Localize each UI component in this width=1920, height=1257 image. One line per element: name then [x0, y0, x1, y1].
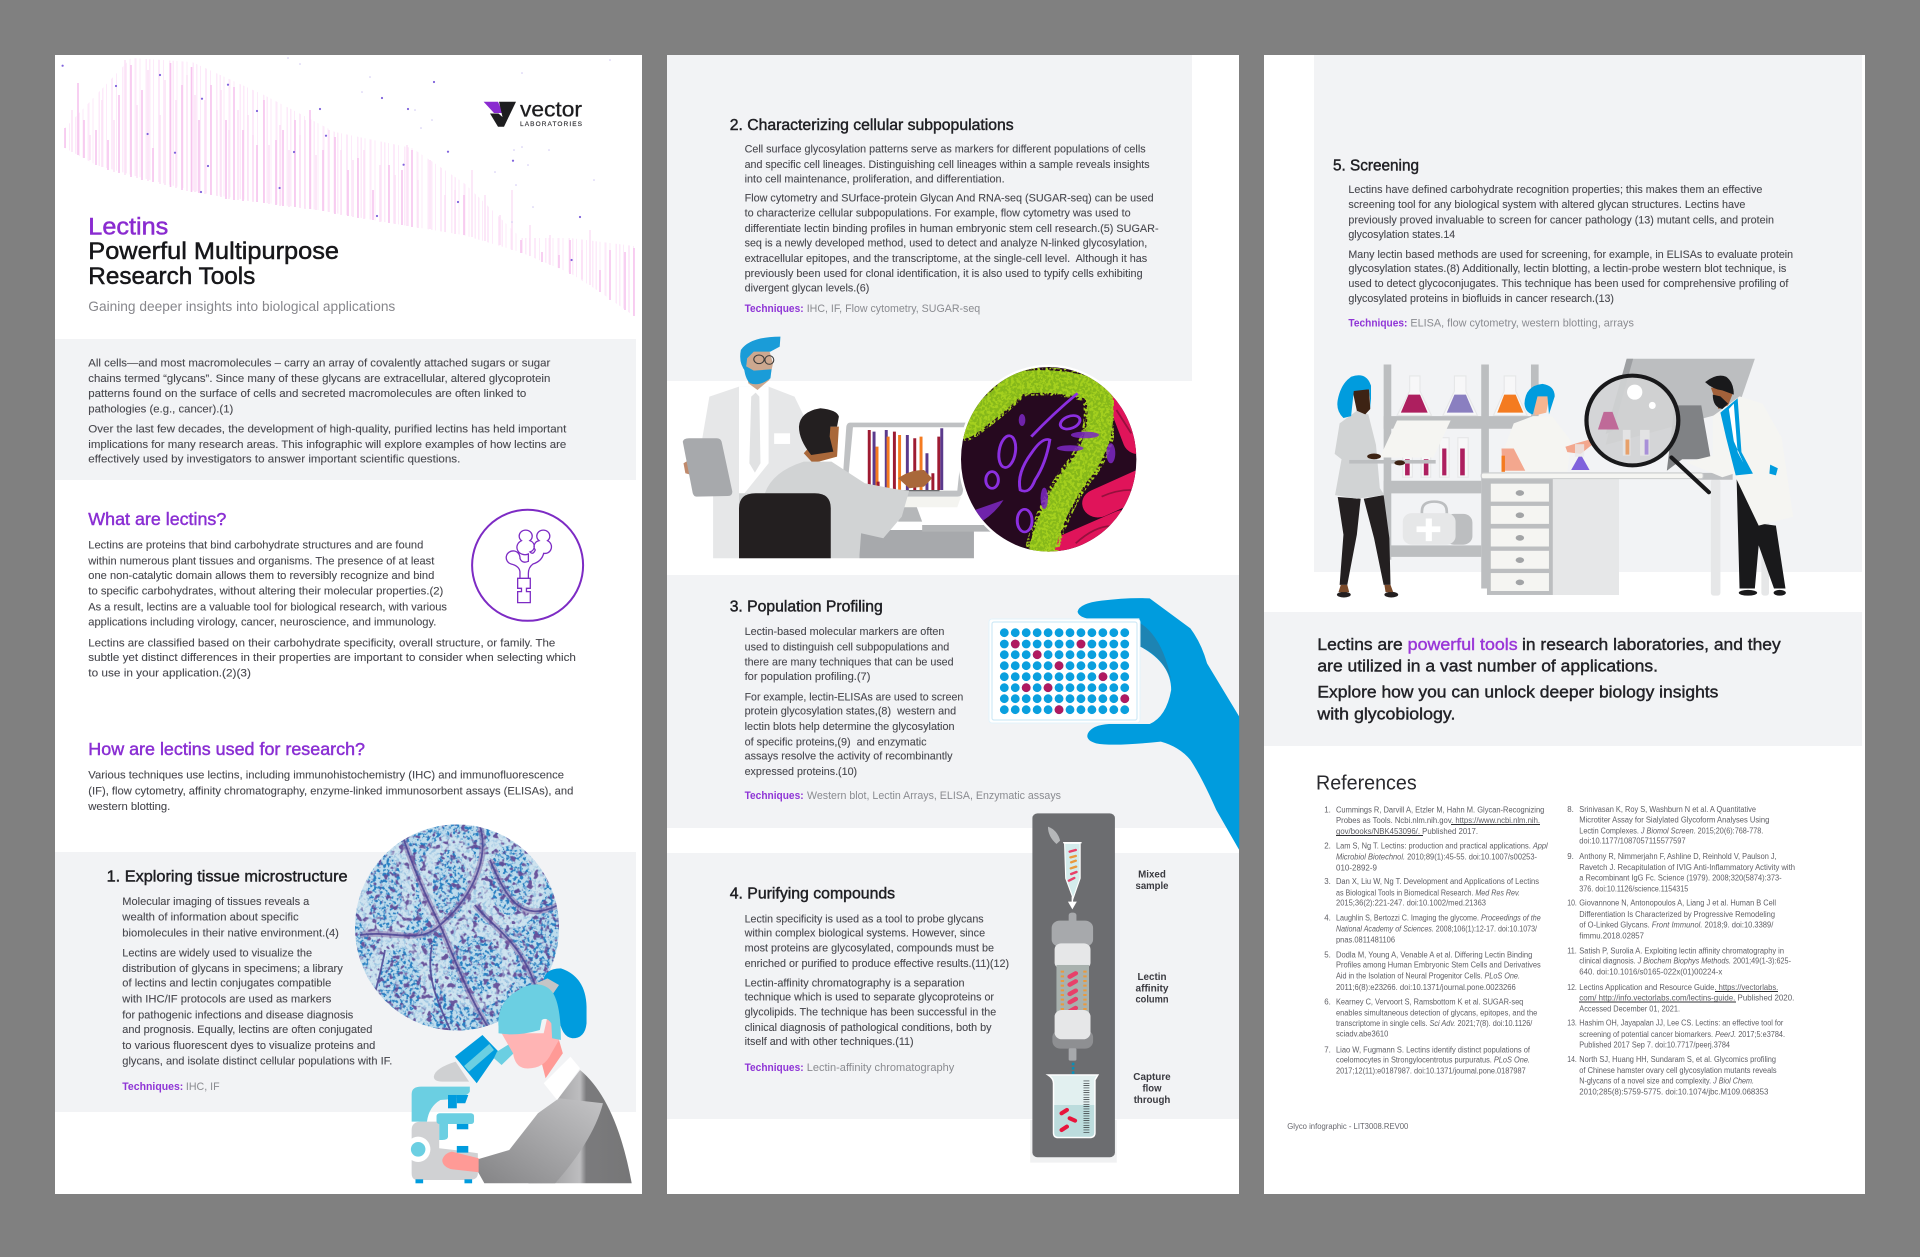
- panel: 1 exploring tissue microstructure: IHC, IF: [186, 1081, 220, 1093]
- panel: 2 characterizing cellular subpopulations: Flow cytometry and SUrface-protein Glycan And RNA-seq (SUGAR-seq) can be used: [745, 193, 1154, 205]
- panel: conclusion: Lectins are: [1317, 635, 1403, 654]
- seated researcher: [739, 408, 932, 558]
- panel: 2 characterizing cellular subpopulations: and specific cell lineages. Distinguishing cell lineages within a sample reveals insights: [745, 159, 1150, 171]
- panel: 3 population profiling: For example, lectin-ELISAs are used to screen: [745, 691, 963, 703]
- label: capture flow through: Capture: [1133, 1072, 1171, 1083]
- logo: Vector Laboratories: vector: [520, 99, 582, 122]
- panel: 1 exploring tissue microstructure: Molecular imaging of tissues reveals a: [122, 896, 310, 908]
- panel: 4 purifying compounds: clinical diagnosis of pathological conditions, both by: [745, 1022, 992, 1034]
- glove: [1078, 598, 1239, 850]
- references: column 2: Satish P, Surolia A. Exploiting lectin affinity chromatography in: [1579, 946, 1784, 955]
- references: column 2: doi:10.1177/1087057115577597: [1579, 836, 1686, 845]
- panel: 5 screening: Techniques:: [1348, 317, 1407, 329]
- references: column 1: 2011;6(8):e23266. doi:10.1371/journal.pone.0023266: [1336, 983, 1516, 992]
- panel: 4 purifying compounds: glycolipids. The technique has been successful in the: [745, 1007, 996, 1019]
- panel: 2 characterizing cellular subpopulations: Techniques:: [745, 303, 804, 315]
- scientist: [442, 968, 632, 1183]
- references: column 2: com/ http://info.vectorlabs.com/lectins-guide. Published 2020.: [1579, 993, 1794, 1002]
- panel: 2 characterizing cellular subpopulations: Cell surface glycosylation patterns serve as markers for different populations of cells: [745, 144, 1146, 156]
- first aid kit: [1403, 502, 1472, 545]
- label: lectin affinity column: [1136, 972, 1169, 1006]
- panel: conclusion: [1264, 612, 1862, 746]
- panel: 2 characterizing cellular subpopulations: differentiate lectin binding profiles in human embryonic stem cell research.(5) SUGAR-: [745, 223, 1159, 235]
- microscope: [406, 1035, 519, 1183]
- panel: page 2 applications: [667, 55, 1239, 1194]
- panel: 5 screening: screening tool for any biological system with altered glycan structures. Lectins have: [1348, 199, 1745, 211]
- panel: 5 screening: ELISA, flow cytometry, western blotting, arrays: [1410, 317, 1634, 329]
- panel: 4 purifying compounds: [667, 853, 1239, 1119]
- label: lectin affinity column: column: [1136, 995, 1168, 1006]
- references: column 1: 6.: [1324, 997, 1331, 1006]
- references: column 1: 2017;12(11):e0187987. doi:10.1371/journal.pone.0187987: [1336, 1067, 1526, 1076]
- section: what are lectins: applications including virology, cancer, neuroscience, and immunology.: [88, 616, 436, 628]
- panel: 3 population profiling: [667, 575, 1239, 828]
- illustration: laboratory scene with magnifier: [1335, 359, 1793, 597]
- references: column 1: Liao W, Fugmann S. Lectins identify distinct populations of: [1336, 1045, 1531, 1054]
- computer: [842, 423, 1014, 558]
- references: column 1: 7.: [1324, 1045, 1331, 1054]
- panel: conclusion: powerful tools: [1408, 635, 1518, 654]
- label: lectin affinity column: Lectin: [1138, 972, 1166, 983]
- panel: 1 exploring tissue microstructure: of lectins and lectin conjugates compatible: [122, 978, 331, 990]
- panel: 2 characterizing cellular subpopulations: [667, 55, 1192, 381]
- references: column 1: as Biological Tools in Biomedical Research. Med Res Rev.: [1336, 888, 1520, 897]
- label: lectin affinity column: affinity: [1136, 983, 1169, 994]
- references: column 2: Srinivasan K, Roy S, Washburn N et al. A Quantitative: [1579, 805, 1757, 814]
- shelves: [1384, 364, 1539, 589]
- panel: 4 purifying compounds: within complex biological systems. However, since: [744, 928, 985, 940]
- panel: 2 characterizing cellular subpopulations: IHC, IF, Flow cytometry, SUGAR-seq: [807, 303, 980, 315]
- references: column 2: a Recombinant IgG Fc. Science (1979). 2008;320(5874):373-: [1579, 873, 1782, 882]
- researcher with laptop: [1335, 375, 1451, 597]
- references: column 1: National Academy of Sciences. 2008;106(1):12-17. doi:10.1073/: [1336, 925, 1538, 934]
- panel: 3 population profiling: Techniques:: [745, 790, 804, 802]
- references: column 2: 11.: [1567, 946, 1577, 955]
- diagram: lectin affinity chromatography column: [1030, 813, 1117, 1163]
- references: column 2: Accessed December 01, 2021.: [1579, 1004, 1680, 1013]
- panel: 5 screening: 5. Screening: [1333, 157, 1419, 174]
- panel: introduction: implications for many research areas. This infographic will explore examples of how lectins are: [88, 439, 566, 451]
- references: column 1: Laughlin S, Bertozzi C. Imaging the glycome. Proceedings of the: [1336, 914, 1541, 923]
- monitor: [1606, 359, 1755, 471]
- references: column 1: Aid in the Isolation of Neural Progenitor Cells. PLoS One.: [1336, 972, 1520, 981]
- references: column 1: gov/books/NBK453096/. Published 2017.: [1336, 827, 1478, 836]
- references: column 2: clinical diagnosis. J Biochem Biophys Methods. 2001;49(1-3):625-: [1579, 957, 1791, 966]
- panel: introduction: All cells—and most macromolecules – carry an array of covalently attached sugars or sugar: [88, 358, 551, 370]
- references: column 1: [1324, 805, 1548, 1076]
- section: what are lectins: Lectins are classified based on their carbohydrate specificity, overall structure, or family. The: [88, 637, 555, 649]
- section: what are lectins: As a result, lectins are a valuable tool for biological research, with various: [88, 601, 447, 613]
- references: column 2: screening of potential cancer biomarkers. PeerJ. 2017;5:e3784.: [1579, 1030, 1785, 1039]
- references: column 2: 12.: [1567, 983, 1577, 992]
- references: column 2: Hashim OH, Jayapalan JJ, Lee CS. Lectins: an effective tool for: [1579, 1018, 1784, 1027]
- references: column 1: coelomocytes in Strongylocentrotus purpuratus. PLoS One.: [1336, 1056, 1530, 1065]
- references: column 1: 2.: [1324, 842, 1331, 851]
- panel: introduction: chains termed “glycans”. Since many of these glycans are extracellular, altered glycoprotein: [88, 373, 550, 385]
- panel: 4 purifying compounds: itself and with other techniques.(11): [745, 1036, 914, 1048]
- illustration: scientist at microscope: [406, 968, 632, 1183]
- references: column 2: Microtiter Assay for Sialylated Glycoform Analyses Using: [1579, 815, 1769, 824]
- references: column 1: Lam S, Ng T. Lectins: production and practical applications. Appl: [1336, 842, 1548, 851]
- panel: conclusion: with glycobiology.: [1316, 704, 1455, 723]
- references: column 2: Giovannone N, Antonopoulos A, Liang J et al. Human B Cell: [1579, 898, 1776, 907]
- panel: 5 screening: glycosylated proteins in biofluids in cancer research.(13): [1348, 293, 1614, 305]
- references: column 1: 010-2892-9: [1336, 863, 1378, 872]
- references: column 1: Probes as Tools. Ncbi.nlm.nih.gov. https://www.ncbi.nlm.nih.: [1336, 816, 1540, 825]
- researcher in lab: [1502, 384, 1594, 472]
- references: column 2: 14.: [1567, 1055, 1577, 1064]
- panel: 1 exploring tissue microstructure: for pathogenic infections and disease diagnosis: [122, 1009, 354, 1021]
- panel: introduction: pathologies (e.g., cancer).(1): [88, 404, 234, 416]
- panel: 3 population profiling: protein glycosylation states,(8) western and: [745, 706, 956, 718]
- panel: 3 population profiling: assays resolve the activity of recombinantly: [745, 751, 953, 763]
- panel: 4 purifying compounds: enriched or purified to produce effective results.(11)(12): [745, 958, 1009, 970]
- references: column 2: Published 2017 Sep 7. doi:10.7717/peerj.3784: [1579, 1040, 1731, 1049]
- panel: 4 purifying compounds: Lectin-affinity chromatography is a separation: [745, 977, 965, 989]
- panel: 1 exploring tissue microstructure: to various fluorescent dyes to visualize proteins and: [122, 1040, 375, 1052]
- title: Research Tools: [88, 263, 255, 290]
- references: column 1: pnas.0811481106: [1336, 936, 1396, 945]
- references: column 2: N-glycans of a novel size and complexity. J Biol Chem.: [1579, 1077, 1754, 1086]
- label: mixed sample: [1136, 869, 1169, 892]
- illustration: researchers at computer: [683, 337, 1014, 558]
- title: [88, 213, 339, 290]
- panel: 1 exploring tissue microstructure: wealth of information about specific: [121, 912, 299, 924]
- references: column 2: 2010;285(8):5759-5775. doi:10.1074/jbc.M109.068353: [1579, 1088, 1769, 1097]
- panel: 2 characterizing cellular subpopulations: 2. Characterizing cellular subpopulations: [730, 117, 1014, 134]
- references: column 2: Lectins Application and Resource Guide. https://vectorlabs.: [1579, 983, 1778, 992]
- section: how are lectins used: Various techniques use lectins, including immunohistochemistry (IHC) and immunofluorescence: [88, 769, 564, 781]
- section: how are lectins used: How are lectins used for research?: [88, 739, 365, 759]
- references: column 1: Microbiol Biotechnol. 2010;89(1):45-55. doi:10.1007/s00253-: [1336, 852, 1537, 861]
- illustration: gloved hand holding well plate: [989, 598, 1239, 850]
- panel: 4 purifying compounds: Techniques:: [745, 1062, 804, 1074]
- panel: page 1 introduction: [55, 55, 642, 1194]
- section: what are lectins: subtle yet distinct differences in their properties are important to consider when selecting which: [88, 652, 576, 664]
- title: Lectins: [88, 213, 168, 240]
- references: column 2: of O-Linked Glycans. Front Immunol. 2018;9. doi:10.3389/: [1579, 920, 1774, 929]
- panel: 4 purifying compounds: technique which is used to separate glycoproteins or: [745, 991, 994, 1003]
- references: column 1: 3.: [1324, 877, 1331, 886]
- references: column 1: 2015;36(2):221-247. doi:10.1002/med.21363: [1336, 899, 1487, 908]
- panel: 2 characterizing cellular subpopulations: previously been used for clonal identification, it is also used to typify cells exhibiting: [745, 268, 1143, 280]
- references: column 2: Lectin Complexes. J Biomol Screen. 2015;20(6):768-778.: [1579, 826, 1763, 835]
- section: what are lectins: [87, 509, 576, 680]
- label: mixed sample: Mixed: [1138, 869, 1166, 880]
- panel: 5 screening: glycosylation states.14: [1348, 229, 1455, 241]
- section: what are lectins: within numerous plant tissues and organisms. The presence of at least: [87, 555, 435, 567]
- section: what are lectins: What are lectins?: [88, 509, 227, 529]
- panel: conclusion: Explore how you can unlock deeper biology insights: [1317, 683, 1718, 702]
- references: column 1: 1.: [1324, 805, 1331, 814]
- references: column 2: Anthony R, Nimmerjahn F, Ashline D, Reinhold V, Paulson J,: [1579, 852, 1777, 861]
- panel: introduction: [55, 339, 636, 480]
- panel: 3 population profiling: there are many techniques that can be used: [745, 657, 954, 669]
- panel: 5 screening: previously proved invaluable to screen for cancer pathology (13) mutant cells, and protein: [1348, 214, 1774, 226]
- references: column 1: Cummings R, Darvill A, Etzler M, Hahn M. Glycan-Recognizing: [1336, 805, 1544, 814]
- beaker: [1048, 1075, 1098, 1138]
- panel: 1 exploring tissue microstructure: biomolecules in their native environment.(4): [122, 927, 339, 939]
- panel: 3 population profiling: 3. Population Profiling: [730, 599, 883, 616]
- label: capture flow through: through: [1134, 1095, 1170, 1106]
- researcher in lab coat: [1686, 376, 1793, 596]
- panel: 5 screening: Lectins have defined carbohydrate recognition properties; this makes them an effective: [1348, 184, 1762, 196]
- references: column 1: Profiles among Human Embryonic Stem Cells and Derivatives: [1336, 960, 1541, 969]
- panel: introduction: patterns found on the surface of cells and secreted macromolecules are often linked to: [88, 388, 526, 400]
- references: column 1: Dodla M, Young A, Venable A et al. Differing Lectin Binding: [1336, 950, 1532, 959]
- panel: 2 characterizing cellular subpopulations: to characterize cellular subpopulations. For example, flow cytometry was used to: [745, 208, 1131, 220]
- section: how are lectins used: [87, 739, 573, 813]
- panel: 4 purifying compounds: Lectin specificity is used as a tool to probe glycans: [745, 913, 984, 925]
- references: column 2: 8.: [1567, 805, 1574, 814]
- section: what are lectins: one non-catalytic domain allows them to reversibly recognize and bind: [88, 570, 434, 582]
- subtitle: Gaining deeper insights into biological applications: [88, 298, 395, 314]
- references: column 1: Dan X, Liu W, Ng T. Development and Applications of Lectins: [1336, 877, 1539, 886]
- section: what are lectins: Lectins are proteins that bind carbohydrate structures and are found: [88, 540, 423, 552]
- panel: 3 population profiling: used to distinguish cell subpopulations and: [745, 641, 949, 653]
- panel: 1 exploring tissue microstructure: glycans, and isolate distinct cellular populations with IF.: [122, 1056, 392, 1068]
- panel: 3 population profiling: of specific proteins,(9) and enzymatic: [745, 736, 927, 748]
- panel: 4 purifying compounds: most proteins are glycosylated, compounds must be: [745, 943, 994, 955]
- section: how are lectins used: western blotting.: [87, 801, 170, 813]
- header decorative data streaks: [55, 57, 640, 316]
- counter and drawers: [1481, 473, 1769, 596]
- references: column 1: 5.: [1324, 950, 1331, 959]
- panel: 5 screening: glycosylation states.(8) Additionally, lectin blotting, a lectin-probe western blot technique, is: [1348, 263, 1787, 275]
- panel: 2 characterizing cellular subpopulations: divergent glycan levels.(6): [745, 282, 870, 294]
- panel: 3 population profiling: expressed proteins.(10): [745, 766, 857, 778]
- references: column 2: 13.: [1567, 1018, 1577, 1027]
- references: column 2: of Chinese hamster ovary cell glycosylation mutants reveals: [1579, 1066, 1777, 1075]
- references: column 1: enables simultaneous detection of glycans, epitopes, and the: [1336, 1008, 1538, 1017]
- label: mixed sample: sample: [1136, 881, 1169, 892]
- panel: 5 screening: Many lectin based methods are used for screening, for example, in ELISAs to evaluate protein: [1348, 249, 1793, 261]
- magnifying glass: [1586, 376, 1709, 492]
- panel: 3 population profiling: lectin blots help determine the glycosylation: [745, 721, 955, 733]
- panel: 2 characterizing cellular subpopulations: into cell maintenance, proliferation, and differentiation.: [745, 173, 1005, 185]
- image: fluorescent micrograph: [957, 365, 1142, 555]
- panel: 1 exploring tissue microstructure: [55, 852, 636, 1112]
- logo: Vector Laboratories: LABORATORIES: [520, 121, 583, 128]
- references: column 2: 640. doi:10.1016/s0165-022x(01)00224-x: [1579, 968, 1722, 977]
- panel: 3 population profiling: Lectin-based molecular markers are often: [745, 626, 944, 638]
- panel: conclusion: are utilized in a vast number of applications.: [1317, 657, 1658, 676]
- icon: lectin glycan in circle: [472, 510, 583, 621]
- references: column 2: Differentiation Is Characterized by Progressive Remodeling: [1579, 910, 1775, 919]
- panel: 1 exploring tissue microstructure: Techniques:: [122, 1081, 183, 1093]
- panel: 1 exploring tissue microstructure: 1. Exploring tissue microstructure: [107, 869, 348, 886]
- well plate: [989, 619, 1140, 723]
- column: [1052, 913, 1093, 1081]
- panel: 2 characterizing cellular subpopulations: extracellular epitopes, and the transcriptome, at the single-cell level. Although it has: [745, 253, 1148, 265]
- image: tissue micrograph: [355, 824, 560, 1031]
- panel: introduction: Over the last few decades, the development of high-quality, purified lectins has held important: [88, 424, 567, 436]
- references: column 2: [1567, 805, 1795, 1097]
- panel: 1 exploring tissue microstructure: distribution of glycans in specimens; a library: [122, 963, 343, 975]
- heading: references: References: [1316, 772, 1417, 794]
- title: Powerful Multipurpose: [88, 238, 339, 265]
- panel: 4 purifying compounds: 4. Purifying compounds: [730, 885, 895, 902]
- logo: Vector Laboratories: [484, 99, 583, 128]
- panel: 5 screening: used to detect glycoconjugates. This technique has been used for comprehensive profiling of: [1348, 278, 1789, 290]
- references: column 1: sciadv.abe3610: [1336, 1030, 1389, 1039]
- references: column 1: 4.: [1324, 914, 1331, 923]
- panel: 4 purifying compounds: Lectin-affinity chromatography: [807, 1062, 955, 1074]
- panel: 5 screening: [1314, 55, 1862, 572]
- references: column 2: fimmu.2018.02857: [1579, 931, 1644, 940]
- panel: page 3 screening and references: [1264, 55, 1865, 1194]
- panel: conclusion: in research laboratories, and they: [1522, 635, 1781, 654]
- label: capture flow through: [1133, 1072, 1171, 1106]
- references: column 2: 9.: [1567, 852, 1574, 861]
- sample tube: [1048, 827, 1082, 909]
- panel: 1 exploring tissue microstructure: with IHC/IF protocols are used as markers: [121, 994, 332, 1006]
- panel: 3 population profiling: for population profiling.(7): [745, 671, 871, 683]
- references: column 1: transcriptome in single cells. Sci Adv. 2021;7(8). doi:10.1126/: [1336, 1019, 1533, 1028]
- panel: 1 exploring tissue microstructure: Lectins are widely used to visualize the: [122, 948, 312, 960]
- standing researcher: [683, 337, 813, 558]
- panel: 3 population profiling: Western blot, Lectin Arrays, ELISA, Enzymatic assays: [807, 790, 1061, 802]
- panel: 2 characterizing cellular subpopulations: seq is a newly developed method, used to detect and analyze N-linked glycosylation,: [745, 238, 1147, 250]
- panel: introduction: effectively used by investigators to answer important scientific questions.: [88, 454, 460, 466]
- references: column 1: Kearney C, Vervoort S, Ramsbottom K et al. SUGAR-seq: [1336, 997, 1523, 1006]
- references: column 2: 10.: [1567, 898, 1577, 907]
- section: what are lectins: to specific carbohydrates, without altering their molecular properties.(2): [88, 586, 444, 598]
- section: how are lectins used: (IF), flow cytometry, affinity chromatography, enzyme-linked immunosorbent assays (ELISAs), and: [88, 785, 573, 797]
- panel: 1 exploring tissue microstructure: and prognosis. Equally, lectins are often conjugated: [122, 1024, 372, 1036]
- references: column 2: North SJ, Huang HH, Sundaram S, et al. Glycomics profiling: [1579, 1055, 1776, 1064]
- references: column 2: 376. doi:10.1126/science.1154315: [1579, 885, 1689, 894]
- references: column 2: Ravetch J. Recapitulation of IVIG Anti-Inflammatory Activity with: [1579, 863, 1795, 872]
- footer code: Glyco infographic - LIT3008.REV00: [1287, 1122, 1409, 1131]
- section: what are lectins: to use in your application.(2)(3): [88, 668, 251, 680]
- label: capture flow through: flow: [1142, 1083, 1162, 1094]
